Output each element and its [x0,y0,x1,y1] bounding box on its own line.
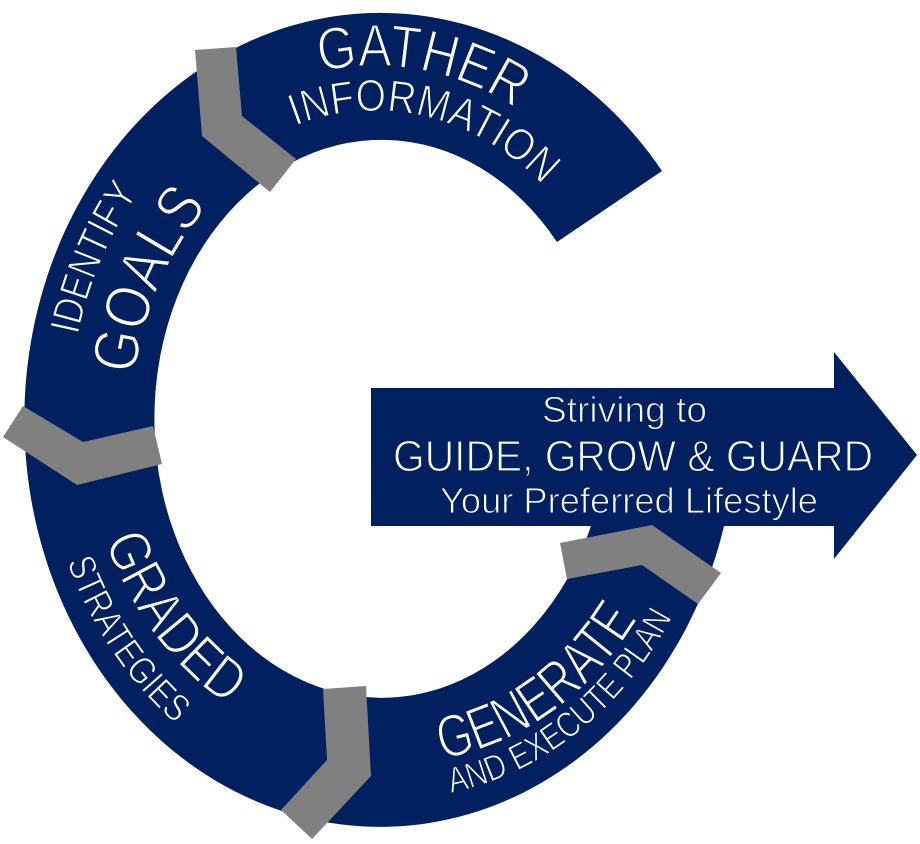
label: generate and execute plan: GENERATE [438,599,636,756]
label: gather information [288,26,561,182]
chevron: generate/arrow divider [560,525,721,604]
arrow: navy pointing right [371,352,917,559]
arrow text: Striving to [542,389,707,430]
label: identify goals: GOALS [94,187,201,368]
arrow text: Your Preferred Lifestyle [440,480,818,521]
label: gather information: GATHER [320,26,528,106]
chevron: graded/generate divider [281,686,371,839]
label: identify goals [51,179,201,368]
label: gather information: INFORMATION [288,80,561,182]
chevron: gather/identify divider [195,47,296,192]
ring: navy G-shaped band [24,13,724,827]
chevron: identify/graded divider [3,406,162,485]
arrow text [393,389,873,521]
label: graded strategies: STRATEGIES [70,557,189,720]
arrow text: GUIDE, GROW & GUARD [393,432,873,481]
label: graded strategies: GRADED [110,534,242,697]
label: identify goals: IDENTIFY [51,179,132,332]
label: generate and execute plan: AND EXECUTE PLAN [452,608,671,792]
